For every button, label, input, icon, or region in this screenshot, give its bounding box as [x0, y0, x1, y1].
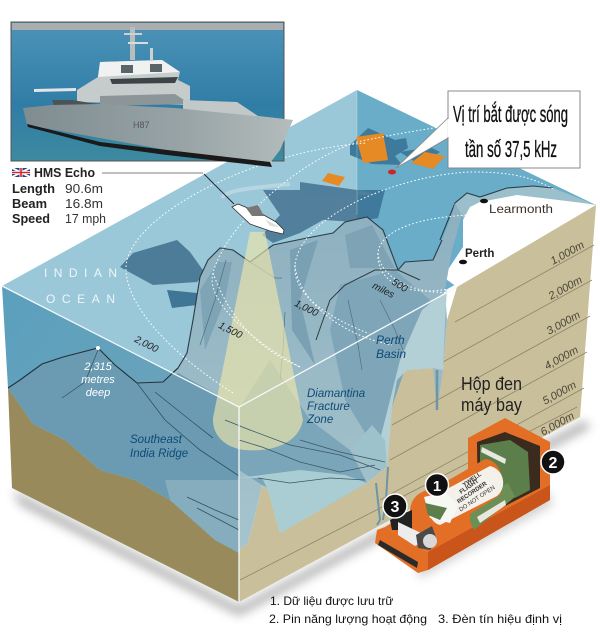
depth scale labels: 1,000m: [549, 239, 587, 268]
legend: 2. Pin năng lượng hoạt động: [269, 612, 427, 626]
HMS Echo specs: [12, 165, 106, 226]
marker 1: [426, 474, 448, 496]
depth scale labels: 5,000m: [541, 379, 579, 408]
icon: UK flag: [12, 168, 30, 177]
legend: 1. Dữ liệu được lưu trữ: [270, 594, 393, 608]
marker 2: [541, 450, 565, 474]
helideck: [34, 88, 76, 92]
block edge lines: [2, 90, 457, 602]
orange core tube: [410, 459, 502, 530]
place labels: [459, 199, 553, 264]
HMS Echo specs: HMS Echo: [34, 165, 95, 180]
survey ship on ocean surface: [222, 184, 290, 234]
HMS Echo specs: Speed: [12, 211, 50, 226]
contour labels: 2,000: [132, 334, 160, 356]
recorder orange casing: [468, 418, 550, 530]
white memory cylinder: [429, 466, 503, 525]
red signal location dot: [388, 170, 396, 174]
ocean name label: INDIAN: [44, 266, 117, 280]
HMS Echo specs: 17 mph: [65, 211, 106, 226]
marker 2: 2: [549, 455, 558, 472]
orange pinger search zones: [322, 133, 445, 186]
depth and feature labels: deep: [86, 387, 110, 399]
place labels: Learmonth: [489, 204, 553, 216]
depth and feature labels: Southeast: [130, 434, 183, 446]
heading: black box: [461, 374, 522, 415]
land and coast: [440, 186, 596, 287]
base plate: [375, 527, 428, 573]
mountain silhouette: [8, 203, 462, 550]
ship fore deck: [183, 100, 293, 124]
marker 1: 1: [433, 478, 441, 495]
ship superstructure: [77, 60, 190, 105]
photo: HMS Echo: [11, 22, 293, 167]
depth and feature labels: metres: [81, 374, 115, 386]
depth scale labels: 3,000m: [545, 309, 583, 338]
orange platform: [385, 470, 550, 570]
flight recorder illustration: DO NOT OPEN: [458, 485, 496, 513]
flight recorder illustration: FLIGHT: [459, 478, 480, 496]
contour labels: [132, 277, 410, 356]
ship mast: [124, 27, 153, 60]
flight recorder illustration: [375, 418, 565, 578]
contour labels: miles: [370, 281, 396, 301]
legend: 3. Đèn tín hiệu định vị: [438, 612, 562, 626]
HMS Echo specs: 16.8m: [65, 196, 103, 211]
HMS Echo specs: Length: [12, 181, 55, 196]
HMS Echo specs: Beam: [12, 196, 47, 211]
depth and feature labels: Zone: [306, 414, 333, 426]
ocean name label: OCEAN: [46, 292, 115, 306]
contour labels: 1,500: [216, 320, 244, 342]
legend: [269, 594, 562, 626]
depth and feature labels: Fracture: [307, 401, 350, 413]
depth and feature labels: [81, 333, 406, 460]
ocean surface: [2, 90, 596, 407]
photo: HMS Echo: H87: [133, 120, 150, 130]
left face water and Southeast India Ridge: [2, 286, 239, 553]
callout: signal location: [396, 91, 580, 168]
depth and feature labels: Basin: [376, 347, 406, 361]
place labels: Perth: [465, 248, 494, 260]
sonar light cone: [213, 232, 303, 450]
flight recorder illustration: YWELL: [462, 472, 483, 489]
seabed block shadow: [12, 420, 590, 616]
ocean name label: [44, 266, 117, 306]
ship hull: [23, 104, 293, 163]
depth scale labels: 2,000m: [546, 274, 585, 303]
contour labels: 500: [389, 277, 410, 295]
marker 3: [383, 494, 407, 518]
heading: black box: máy bay: [461, 395, 522, 415]
depth scale labels: [539, 239, 587, 439]
HMS Echo specs: 90.6m: [65, 181, 103, 196]
depth and feature labels: 2,315: [83, 361, 113, 373]
left face brown ground: [8, 388, 239, 602]
heading: black box: Hộp đen: [461, 374, 522, 394]
tan continental wall with depth lines: [239, 205, 596, 602]
beacon: [390, 510, 412, 530]
depth and feature labels: Perth: [376, 333, 405, 347]
HMS Echo leader lines: [102, 173, 234, 204]
distance rings: [126, 127, 555, 393]
search area dark patches: [120, 128, 440, 308]
depth scale labels: 6,000m: [539, 410, 577, 439]
ring continuation on mountains: [213, 253, 450, 367]
flight recorder illustration: RECORDER: [457, 481, 489, 505]
marker 3: 3: [391, 499, 400, 516]
depth and feature labels: Diamantina: [307, 388, 365, 400]
contour labels: 1,000: [292, 298, 320, 320]
circuit boards: [480, 440, 530, 498]
depth and feature labels: India Ridge: [130, 448, 188, 460]
sea floor ridge lines: [225, 370, 437, 525]
depth scale labels: 4,000m: [543, 344, 581, 373]
